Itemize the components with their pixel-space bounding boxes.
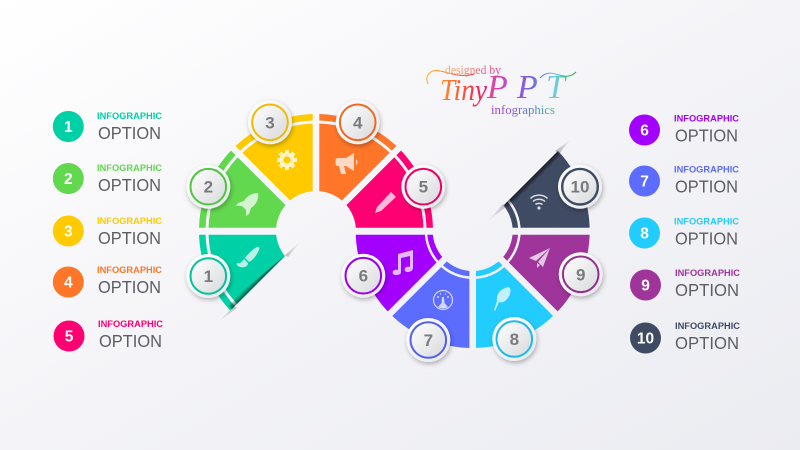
legend item 8: INFOGRAPHIC [674, 216, 739, 228]
legend item 7: INFOGRAPHIC [674, 164, 739, 176]
badge 4 [336, 100, 380, 144]
segment 6 [356, 231, 442, 314]
segment 7 [390, 261, 473, 348]
legend item 7: OPTION [675, 176, 738, 196]
badge 1 [186, 254, 230, 298]
legend item 7: 7 [640, 174, 649, 190]
legend item 2: INFOGRAPHIC [97, 163, 162, 174]
badge 9: 9 [576, 265, 585, 284]
icon: music note [393, 250, 413, 275]
badge 7 [406, 318, 450, 362]
legend item 4 [53, 265, 162, 298]
logo: designed by TinyPPT infographics: designed by [445, 63, 502, 77]
segment 2 [202, 151, 288, 231]
badge 6 [341, 254, 385, 298]
icon: pencil [375, 192, 396, 213]
icon: paint brush [237, 247, 259, 267]
legend item 6: OPTION [675, 126, 738, 146]
icon: wifi [530, 195, 548, 210]
badge 3: 3 [265, 113, 275, 132]
right legend [629, 114, 740, 354]
legend item 7 [629, 164, 739, 196]
legend item 8 [629, 216, 739, 248]
legend item 4: INFOGRAPHIC [97, 265, 162, 276]
legend item 10: 10 [637, 330, 654, 348]
legend item 6 [629, 114, 739, 146]
left half wheel [202, 117, 430, 311]
badge 7: 7 [424, 331, 433, 350]
legend item 6: 6 [640, 122, 649, 140]
legend item 10: INFOGRAPHIC [675, 321, 740, 332]
number badges [186, 100, 603, 362]
legend item 2 [53, 163, 162, 195]
segment 1 [202, 231, 288, 311]
logo: designed by TinyPPT infographics: PPT [486, 69, 567, 106]
icon: feather [494, 287, 510, 311]
legend item 8: 8 [640, 226, 649, 242]
badge 2 [186, 165, 230, 209]
segment 9 [503, 231, 590, 314]
badge 2: 2 [204, 178, 213, 197]
legend item 9: 9 [641, 278, 650, 294]
badge 5: 5 [419, 178, 428, 197]
right half wheel [356, 148, 590, 348]
icon: megaphone [336, 153, 358, 174]
badge 9 [559, 252, 603, 296]
badge 6: 6 [359, 267, 368, 286]
legend item 6: INFOGRAPHIC [674, 114, 739, 124]
legend item 9: INFOGRAPHIC [675, 268, 740, 279]
badge 1: 1 [204, 267, 213, 286]
legend item 8: OPTION [675, 228, 738, 248]
badge 8: 8 [510, 330, 519, 349]
legend item 10: OPTION [675, 333, 739, 353]
legend item 4: OPTION [98, 277, 161, 297]
badge 5 [401, 165, 445, 209]
legend item 5 [54, 319, 163, 352]
badge 10 [558, 165, 602, 209]
legend item 4: 4 [64, 274, 73, 292]
legend item 2: 2 [64, 171, 73, 188]
legend item 1: OPTION [98, 123, 161, 143]
icon: gear [273, 146, 301, 174]
legend item 1: 1 [64, 119, 73, 136]
legend item 5: OPTION [99, 331, 162, 351]
segment 4 [316, 117, 396, 203]
legend item 9 [630, 268, 740, 300]
legend item 5: 5 [65, 328, 74, 346]
segment 8 [473, 261, 555, 348]
segment 3 [236, 117, 316, 203]
badge 10: 10 [571, 178, 589, 197]
badge 3 [248, 100, 292, 144]
segment 5 [344, 151, 430, 231]
segment icons [236, 146, 550, 311]
legend item 3: OPTION [98, 228, 161, 248]
legend item 1: INFOGRAPHIC [97, 111, 162, 122]
legend item 5: INFOGRAPHIC [98, 319, 163, 330]
legend item 3: 3 [64, 224, 73, 240]
legend item 3 [53, 216, 162, 248]
logo: designed by TinyPPT infographics: infographics [491, 103, 555, 117]
legend item 9: OPTION [675, 280, 739, 300]
cut shadow tails [217, 139, 571, 323]
logo: designed by TinyPPT infographics: Tiny [440, 72, 487, 107]
icon: rocket [236, 193, 258, 216]
left legend [53, 111, 163, 352]
legend item 2: OPTION [98, 175, 161, 195]
badge 8 [492, 317, 536, 361]
icon: gauge [434, 290, 452, 310]
legend item 3: INFOGRAPHIC [97, 216, 162, 227]
icon: paper plane [529, 248, 550, 268]
legend item 10 [630, 321, 740, 354]
legend item 1 [53, 111, 162, 143]
logo: designed by TinyPPT infographics [427, 63, 576, 117]
badge 4: 4 [353, 113, 363, 132]
segment 10 [503, 148, 590, 231]
